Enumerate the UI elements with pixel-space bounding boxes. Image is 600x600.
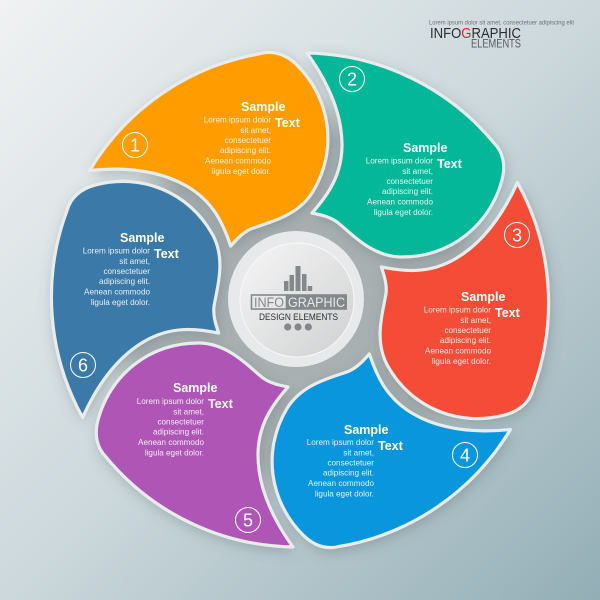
number badge 6: 6 xyxy=(78,356,88,376)
panel heading: Sample xyxy=(241,100,286,114)
body text: Aenean commodo xyxy=(138,438,204,447)
body text: Aenean commodo xyxy=(308,479,374,488)
center wordmark: graphic: GRAPHIC xyxy=(288,295,345,310)
body text: consectetuer xyxy=(444,326,491,335)
body text: Aenean commodo xyxy=(84,288,150,296)
number badge 2 xyxy=(340,66,364,92)
panel heading: Sample xyxy=(403,141,448,155)
number badge 5: 5 xyxy=(243,510,253,530)
body text: consectetuer xyxy=(103,267,150,276)
outer ring xyxy=(228,231,364,367)
body text: adipiscing elit. xyxy=(220,146,271,155)
petal shape xyxy=(235,328,510,600)
petal shape xyxy=(96,343,293,547)
body text: Lorem ipsum dolor xyxy=(307,438,374,447)
header: infographic elements xyxy=(429,20,574,50)
panel 2: teal xyxy=(307,53,504,257)
number badge 4 xyxy=(452,442,478,468)
inner disc xyxy=(240,243,354,357)
panel 3: red xyxy=(341,183,600,455)
body text: adipiscing elit. xyxy=(440,336,491,345)
body text: sit amet, xyxy=(173,408,204,416)
body text: Aenean commodo xyxy=(367,198,433,206)
body text: adipiscing elit. xyxy=(323,468,374,478)
body text: consectetuer xyxy=(327,458,374,468)
body text: consectetuer xyxy=(157,418,204,426)
body text: Lorem ipsum dolor xyxy=(83,246,150,256)
body text: ligula eget dolor. xyxy=(212,167,271,176)
header caption: Lorem ipsum dolor sit amet, consectetuer adipiscing elit xyxy=(429,20,574,26)
body text: Lorem ipsum dolor xyxy=(424,306,491,314)
panel heading: Sample xyxy=(120,231,165,245)
body text: sit amet, xyxy=(460,316,491,325)
body text: sit amet, xyxy=(402,167,433,176)
number badge 2: 2 xyxy=(347,70,357,90)
body text: ligula eget dolor. xyxy=(145,448,204,458)
number badge 3 xyxy=(504,222,530,248)
body text: adipiscing elit. xyxy=(99,277,150,286)
center dots xyxy=(284,323,312,331)
panel 4: blue xyxy=(235,328,510,600)
body text: sit amet, xyxy=(119,257,150,266)
number badge 6 xyxy=(70,352,96,378)
petal shape xyxy=(307,53,504,257)
body text: Aenean commodo xyxy=(425,346,491,356)
panel heading: Text xyxy=(208,397,234,411)
number badge 1 xyxy=(122,132,148,158)
panel 5: purple xyxy=(96,343,293,547)
center badge xyxy=(228,231,364,367)
icon: bar chart xyxy=(284,266,312,291)
body text: ligula eget dolor. xyxy=(91,298,150,307)
header title: INFOGRAPHIC xyxy=(430,25,521,42)
petal shape xyxy=(341,183,600,455)
body text: ligula eget dolor. xyxy=(374,208,433,217)
panel heading: Text xyxy=(275,116,301,130)
panel heading: Text xyxy=(495,306,521,320)
body text: consectetuer xyxy=(386,177,433,186)
panel heading: Text xyxy=(378,439,404,453)
center subtitle: DESIGN ELEMENTS xyxy=(259,312,338,323)
panel 1: orange xyxy=(90,0,365,272)
number badge 5 xyxy=(236,508,260,532)
body text: adipiscing elit. xyxy=(153,428,204,436)
body text: Lorem ipsum dolor xyxy=(204,116,271,124)
body text: sit amet, xyxy=(343,448,374,458)
panel heading: Sample xyxy=(173,381,218,395)
petal shape xyxy=(90,0,365,272)
body text: adipiscing elit. xyxy=(382,187,433,196)
panel heading: Sample xyxy=(344,423,389,437)
body text: Aenean commodo xyxy=(205,156,271,166)
panel heading: Text xyxy=(437,157,463,171)
petal shape xyxy=(0,145,259,417)
center wordmark: info: INFO xyxy=(254,295,284,310)
number badge 3: 3 xyxy=(512,226,522,246)
body text: Lorem ipsum dolor xyxy=(137,397,204,406)
number badge 1: 1 xyxy=(130,136,140,156)
body text: ligula eget dolor. xyxy=(315,490,374,498)
body text: sit amet, xyxy=(240,126,271,135)
body text: Lorem ipsum dolor xyxy=(366,156,433,166)
panel heading: Text xyxy=(154,247,180,261)
body text: ligula eget dolor. xyxy=(432,357,491,366)
header subtitle: ELEMENTS xyxy=(471,38,521,50)
number badge 4: 4 xyxy=(460,446,470,466)
body text: consectetuer xyxy=(224,136,271,145)
panel 6: steel blue xyxy=(0,145,259,417)
panel heading: Sample xyxy=(461,290,506,304)
